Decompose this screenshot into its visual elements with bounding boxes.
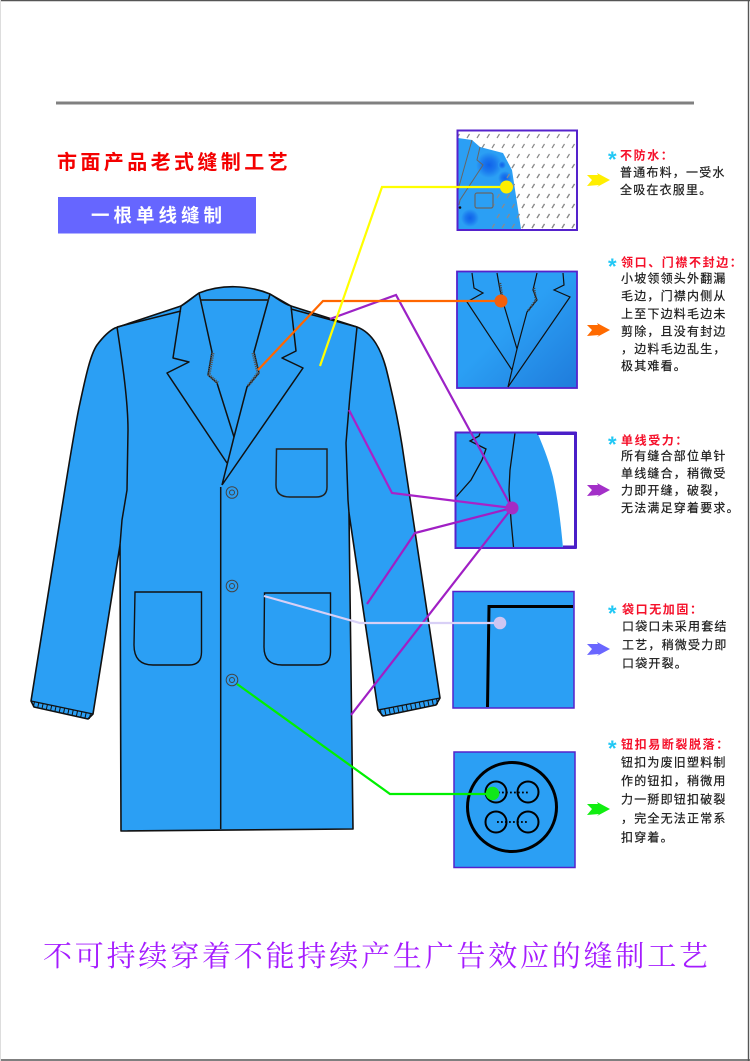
callout line: green button [237, 684, 499, 800]
callout text: collar unsealed: 毛边，门襟内侧从 [621, 288, 727, 303]
divider bar [56, 102, 694, 104]
callout text: button breakage: 扣穿着。 [621, 830, 674, 844]
panel: single-thread seam detail [456, 432, 576, 548]
callout text: single thread stress: 无法满足穿着要求。 [621, 500, 740, 515]
callout text: single thread stress: 力即开缝，破裂， [621, 482, 727, 498]
callout text: button breakage: * [608, 736, 617, 761]
title: 市面产品老式缝制工艺 [57, 150, 291, 174]
callout text: collar unsealed [608, 254, 743, 373]
arrow: yellow [587, 173, 610, 187]
lower right pocket [264, 593, 330, 665]
coat silhouette [31, 287, 440, 831]
callout text: pocket opening: * [608, 601, 617, 626]
callout text: collar unsealed: 剪除，且没有封边 [621, 324, 727, 338]
shoulder lines [117, 309, 357, 327]
callout text: pocket opening: 工艺，稍微受力即 [622, 638, 728, 652]
neck line [201, 299, 269, 301]
panel: pocket detail [453, 592, 574, 708]
bottom slogan: 不可持续穿着不能持续产生广告效应的缝制工艺 [43, 940, 711, 973]
arrow: orange [587, 323, 610, 337]
callout lines: purple seams [330, 295, 518, 715]
callout text: collar unsealed: 上至下边料毛边未 [621, 307, 727, 321]
callout text: not waterproof: 普通布料，一受水 [620, 166, 726, 180]
right lapel [222, 294, 303, 485]
panel: collar detail [457, 272, 577, 388]
subtitle badge: 一根单线缝制 [91, 205, 226, 226]
panel: waterproofing detail [458, 130, 577, 230]
callout line: lavender pocket [264, 596, 506, 629]
callout line: orange collar [258, 294, 508, 370]
callout text: collar unsealed: * [608, 254, 617, 279]
callout text: button breakage: 力一掰即钮扣破裂 [621, 792, 727, 806]
callout text: single thread stress: 单线受力： [621, 432, 689, 448]
callout text: single thread stress: 所有缝合部位单针 [621, 448, 727, 463]
coat illustration [31, 287, 440, 831]
panel: button detail [454, 752, 575, 868]
collar frayed edges [209, 353, 258, 386]
callout text: pocket opening: 袋口无加固： [622, 602, 704, 616]
callout text: collar unsealed: 极其难看。 [621, 359, 687, 373]
placket [220, 487, 222, 829]
subtitle badge [58, 197, 256, 234]
callout text: collar unsealed: ，边料毛边乱生， [621, 342, 727, 356]
callout text: single thread stress: * [608, 432, 617, 457]
callout text: button breakage: 作的钮扣，稍微用 [621, 773, 727, 788]
callout text: single thread stress [608, 432, 740, 515]
callout text: collar unsealed: 小坡领领头外翻漏 [621, 272, 727, 286]
callout text: collar unsealed: 领口、门襟不封边： [621, 254, 743, 270]
callout text: pocket opening: 口袋开裂。 [622, 656, 688, 670]
left lapel [167, 293, 234, 463]
right cuff [378, 698, 440, 713]
left cuff [31, 701, 93, 716]
callout text: not waterproof: 全吸在衣服里。 [620, 182, 712, 197]
callout text: not waterproof: * [608, 147, 617, 172]
callout text: pocket opening: 口袋口未采用套结 [622, 620, 728, 634]
sleeve seams [117, 327, 357, 545]
callout text: not waterproof: 不防水： [620, 148, 674, 162]
callout text: button breakage: ，完全无法正常系 [621, 810, 727, 826]
buttons [226, 487, 238, 686]
callout text: button breakage [608, 736, 730, 844]
arrow: periwinkle [587, 642, 610, 656]
arrow: green [587, 802, 610, 816]
callout text: button breakage: 钮扣易断裂脱落： [621, 736, 730, 752]
callout text: button breakage: 钮扣为废旧塑料制 [621, 754, 727, 770]
callout text: pocket opening [608, 601, 728, 670]
callout line: yellow fabric [320, 180, 513, 366]
lower left pocket [134, 592, 202, 665]
callout text: not waterproof [608, 147, 726, 197]
arrow: purple [587, 483, 610, 497]
chest pocket [276, 449, 327, 497]
callout text: single thread stress: 单线缝合，稍微受 [621, 466, 727, 480]
